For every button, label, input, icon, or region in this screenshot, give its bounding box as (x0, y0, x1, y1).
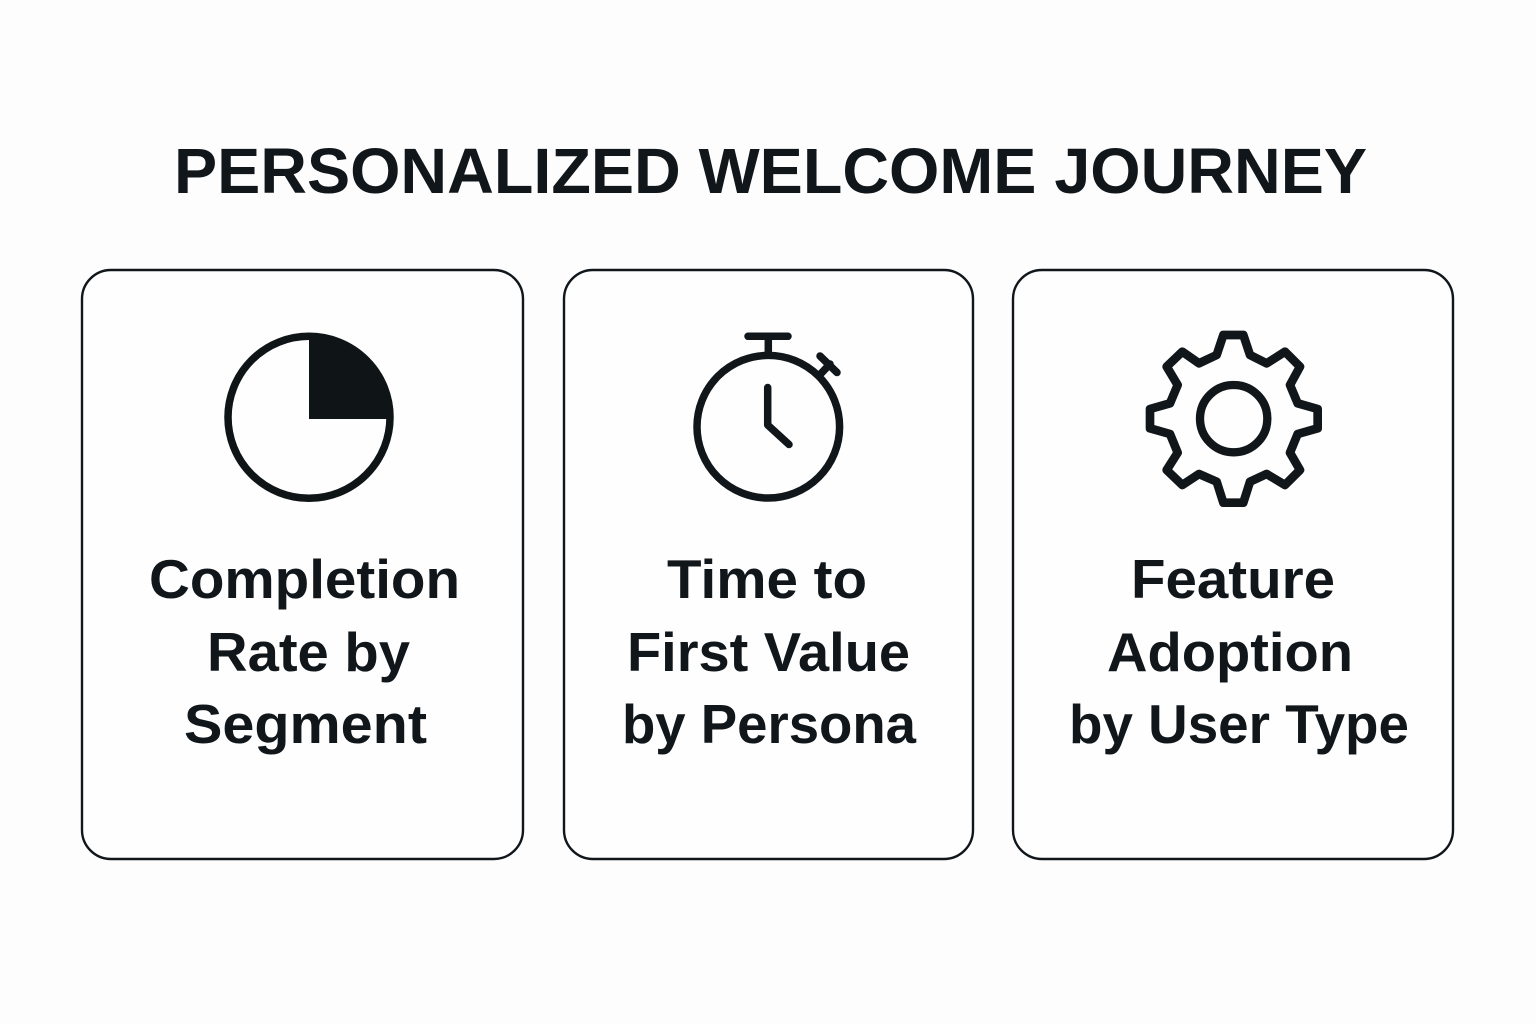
text: feature adoption by user type (1069, 548, 1409, 755)
card outline: completion rate (82, 270, 523, 859)
icon: gear (1150, 335, 1318, 503)
text: time to first value by persona: by Persona (622, 693, 916, 755)
text: time to first value by persona: Time to (667, 548, 867, 610)
text: feature adoption by user type: Feature (1131, 548, 1335, 610)
text: completion rate by segment: Rate by (207, 621, 410, 683)
title: PERSONALIZED WELCOME JOURNEY (174, 135, 1367, 207)
icon: pie chart (228, 333, 394, 498)
text: time to first value by persona: First Value (627, 621, 910, 683)
card outline: time to first value (564, 270, 973, 859)
card outline: feature adoption (1013, 270, 1453, 859)
text: completion rate by segment (149, 548, 460, 755)
panel: feature adoption by user type (1013, 270, 1453, 859)
text: completion rate by segment: Completion (149, 548, 460, 610)
icon: stopwatch (697, 336, 840, 498)
text: completion rate by segment: Segment (184, 693, 427, 755)
text: feature adoption by user type: by User Type (1069, 693, 1409, 755)
text: time to first value by persona (622, 548, 916, 755)
panel: completion rate by segment (82, 270, 523, 859)
panel: time to first value by persona (564, 270, 973, 859)
text: feature adoption by user type: Adoption (1107, 621, 1353, 683)
